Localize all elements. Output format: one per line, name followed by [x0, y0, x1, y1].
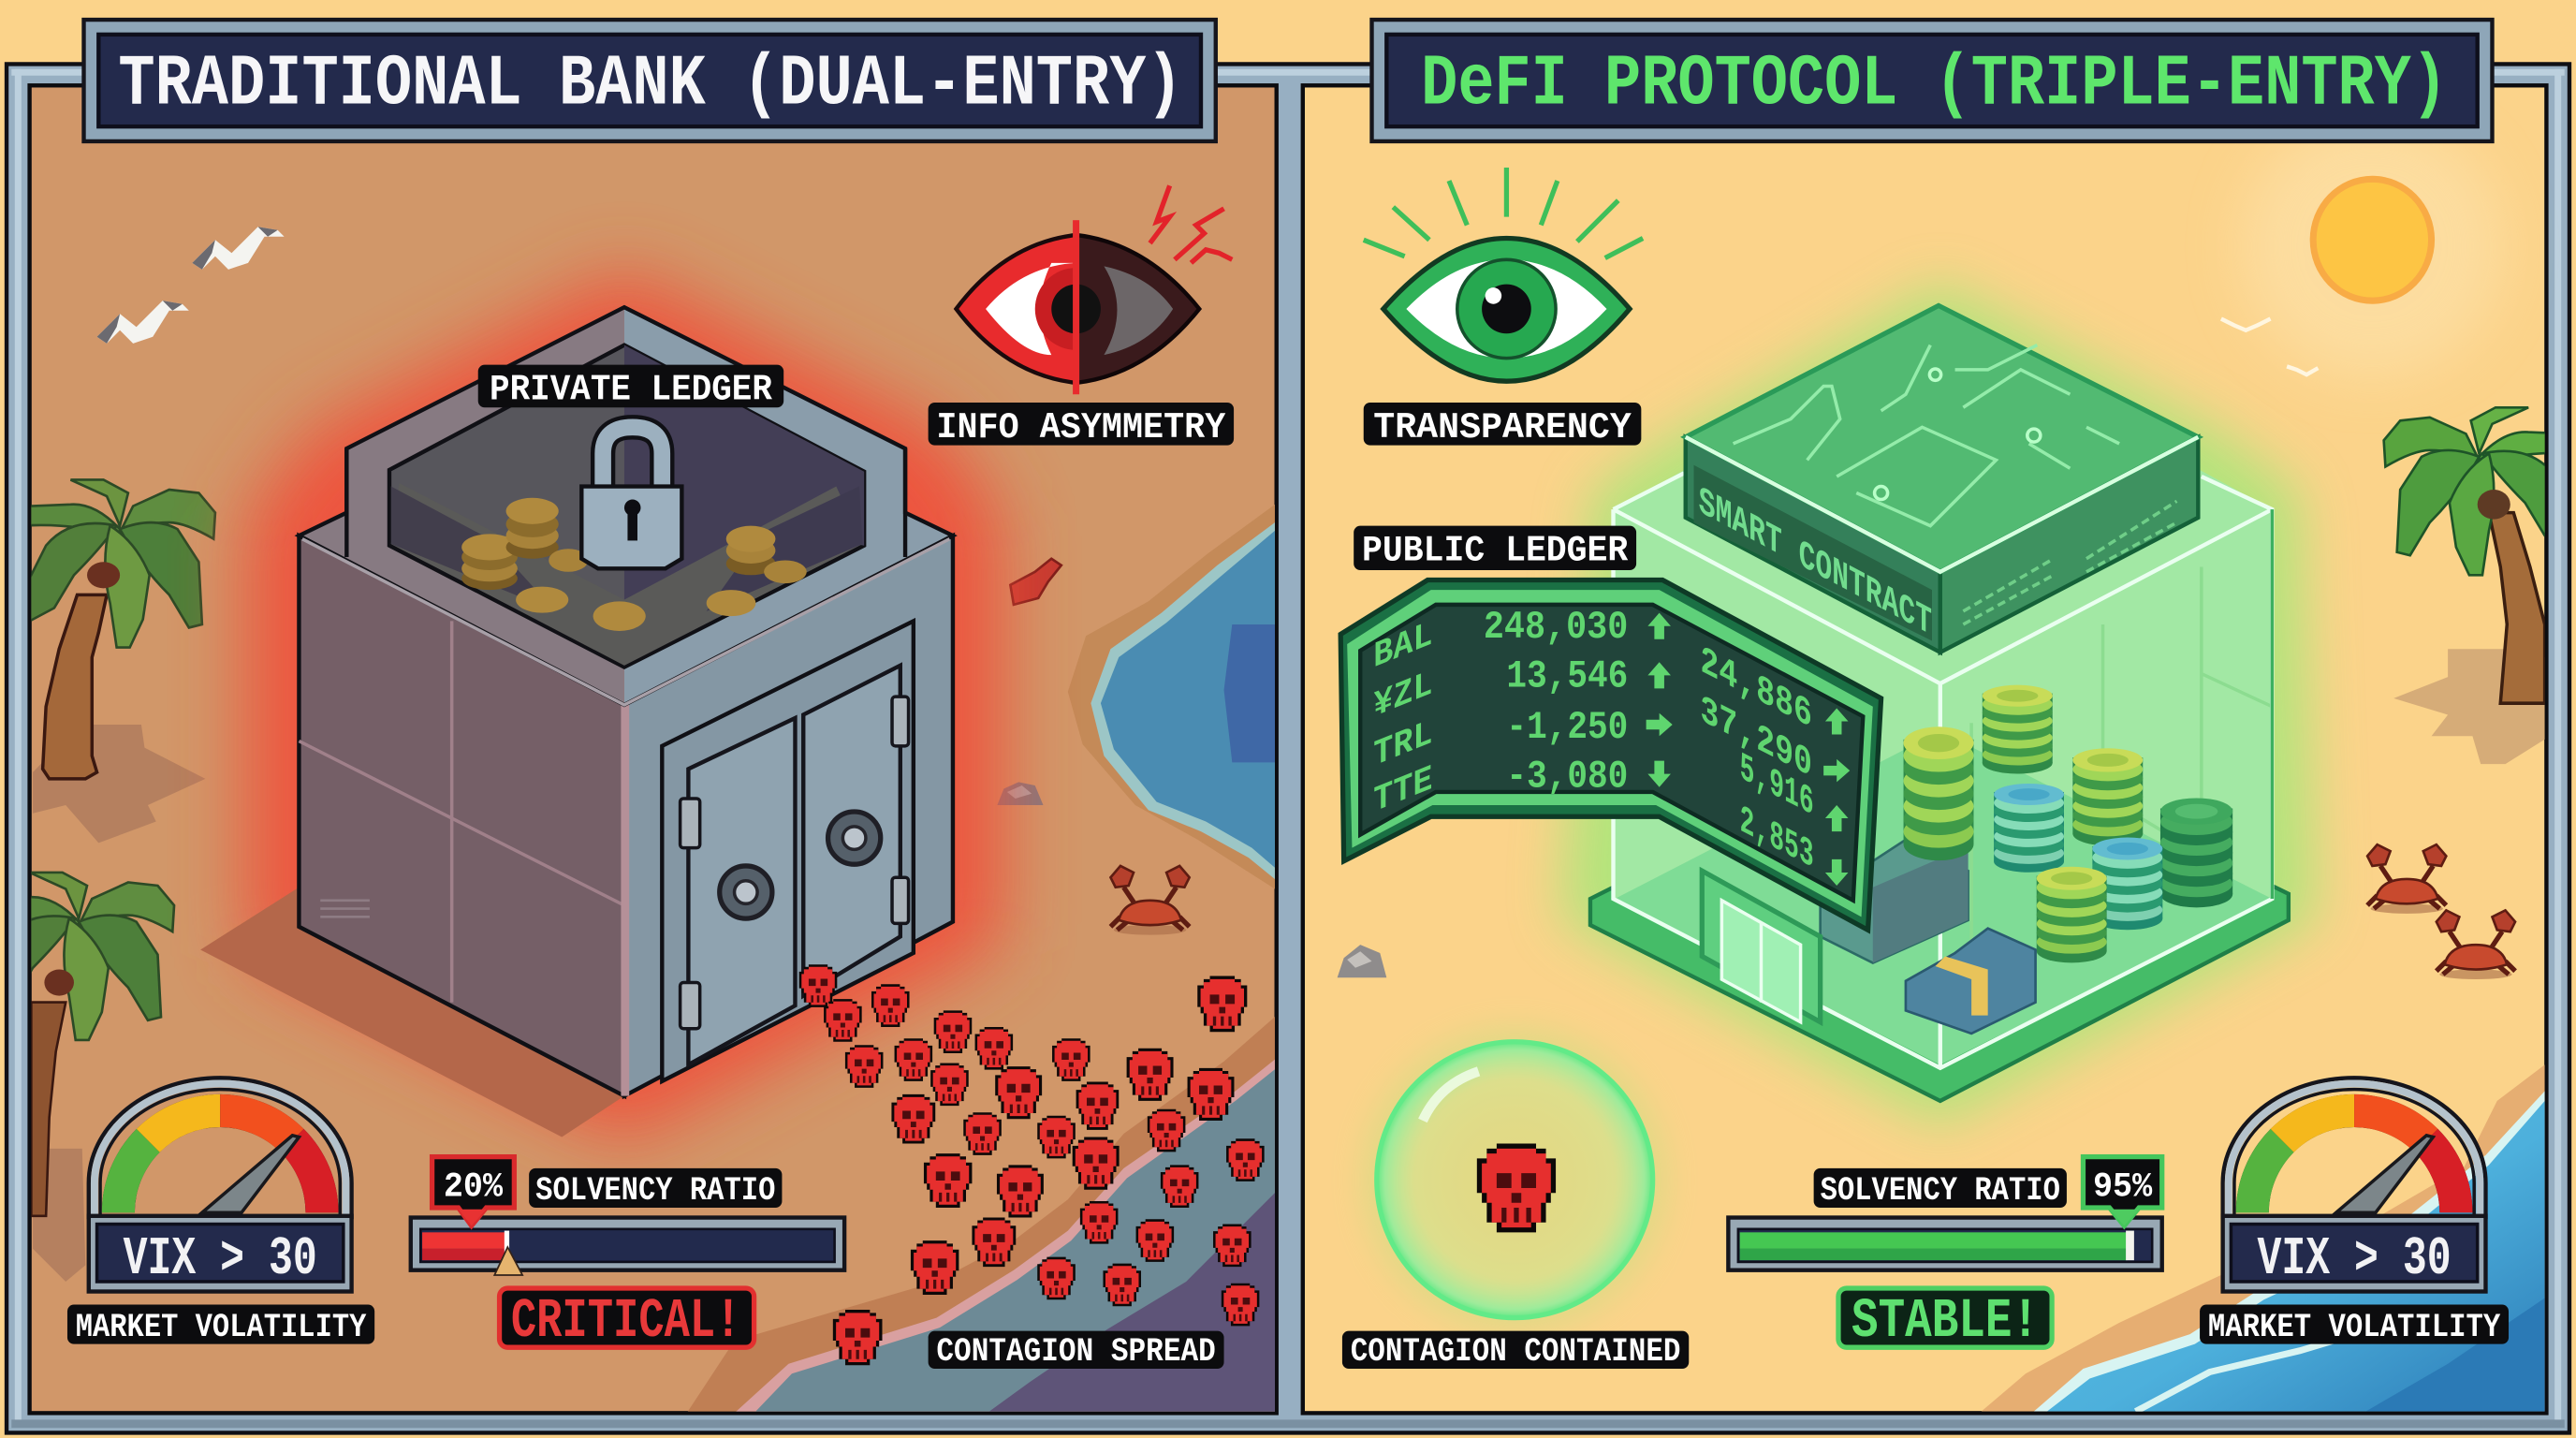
vault shadow	[200, 888, 624, 1137]
seagulls	[97, 227, 285, 344]
solvency pointer 20%	[432, 1157, 514, 1225]
icon: green eye	[1364, 168, 1643, 381]
transparency label: TRANSPARENCY	[1373, 407, 1632, 448]
volatility gauge right	[2223, 1078, 2485, 1292]
fill	[1740, 1232, 2128, 1249]
green building glow	[1560, 283, 2317, 1125]
palm shadow	[2393, 649, 2545, 764]
solvency ratio label right: SOLVENCY RATIO	[1821, 1172, 2060, 1210]
ledger values angled: 24,886	[1701, 638, 1812, 740]
sun	[2241, 115, 2504, 378]
contagion spread label: CONTAGION SPREAD	[936, 1333, 1216, 1371]
coin stacks	[1904, 685, 2232, 962]
distant birds	[2221, 318, 2318, 374]
cash boxes blue	[1906, 929, 2036, 1034]
crabs	[2367, 844, 2515, 979]
vix value: VIX > 30	[2258, 1229, 2452, 1290]
vault door	[662, 621, 914, 1081]
ledger left labels: ¥ZL	[1373, 664, 1432, 728]
info asymmetry label: INFO ASYMMETRY	[936, 407, 1226, 448]
rock	[997, 782, 1043, 805]
palm shadow	[33, 725, 205, 843]
market volatility label: MARKET VOLATILITY	[2208, 1309, 2500, 1346]
icon: split red eye	[956, 185, 1232, 394]
ledger values: -3,080	[1506, 755, 1628, 800]
vault glass interior	[389, 345, 864, 668]
crab	[1110, 866, 1190, 935]
palm tree lower	[31, 871, 176, 1282]
panel background	[1303, 85, 2546, 1413]
small crab	[1010, 559, 1061, 605]
ledger values angled: 37,290	[1701, 688, 1812, 789]
coastline: grey sea	[687, 1016, 1277, 1416]
building glass	[1614, 329, 2272, 1064]
ledger values: 248,030	[1484, 605, 1628, 650]
vault dial	[720, 866, 772, 918]
building edges	[1614, 473, 2272, 1068]
ledger left labels	[1373, 614, 1432, 824]
palm tree right	[2382, 406, 2545, 764]
building floor	[1615, 731, 2272, 1064]
vix value: VIX > 30	[124, 1229, 317, 1290]
ledger values angled: 5,916	[1740, 745, 1814, 828]
eye rays	[1364, 168, 1643, 258]
solvency pointer 95%: 95%	[2093, 1168, 2153, 1208]
ledger values	[1484, 605, 1673, 800]
building base	[1590, 723, 2289, 1101]
vault	[299, 307, 953, 1096]
palm tree upper	[22, 479, 215, 843]
coastline: blue sea	[1982, 1064, 2545, 1412]
heading: traditional bank	[84, 20, 1216, 141]
padlock	[581, 427, 681, 568]
gold coins	[461, 498, 807, 631]
ledger values angled: 2,853	[1740, 798, 1814, 880]
vault red glow	[246, 271, 1003, 1142]
solvency ratio label left: SOLVENCY RATIO	[535, 1172, 775, 1210]
panel: traditional bank	[0, 85, 1277, 1416]
contained skull	[1477, 1144, 1556, 1232]
critical badge: CRITICAL!	[511, 1289, 741, 1353]
panel background	[30, 85, 1277, 1413]
solvency bar right	[1728, 1218, 2162, 1270]
heading: traditional bank: TRADITIONAL BANK (DUAL-ENTRY)	[118, 45, 1183, 126]
ledger left labels: TRL	[1373, 713, 1432, 777]
smart contract text: SMART CONTRACT	[1699, 478, 1932, 647]
market volatility label: MARKET VOLATILITY	[76, 1309, 366, 1346]
ledger left labels: BAL	[1373, 614, 1432, 679]
public ledger label: PUBLIC LEDGER	[1362, 530, 1629, 571]
solvency pointer 95%	[2083, 1157, 2162, 1225]
private ledger label: PRIVATE LEDGER	[490, 369, 773, 410]
building door	[1702, 871, 1821, 1022]
panel: defi protocol	[1303, 85, 2576, 1413]
stable badge: STABLE!	[1852, 1289, 2039, 1353]
vault top rim	[299, 307, 624, 705]
solvency bar left	[411, 1218, 844, 1275]
smart contract roof	[1686, 305, 2198, 653]
lightning marks	[1150, 185, 1232, 263]
red skulls: contagion spread	[799, 964, 1265, 1365]
coastline: water	[1068, 505, 1275, 889]
solvency pointer 20%: 20%	[444, 1168, 504, 1208]
public ledger screen	[1340, 580, 1881, 930]
circuit traces	[1734, 345, 2119, 526]
ledger left labels: TTE	[1373, 759, 1432, 824]
vault left face	[299, 536, 624, 1096]
glass bank building	[1590, 305, 2289, 1101]
ledger values: 13,546	[1506, 654, 1628, 699]
contagion bubble	[1364, 1029, 1666, 1331]
heading: defi protocol	[1372, 20, 2492, 141]
fill	[422, 1232, 506, 1249]
rock	[1338, 945, 1386, 977]
ledger values angled	[1701, 638, 1850, 886]
volatility gauge left	[89, 1078, 352, 1292]
palm shadow	[33, 1149, 85, 1282]
vault right face	[624, 536, 953, 1096]
contagion contained label: CONTAGION CONTAINED	[1351, 1333, 1680, 1371]
cash boxes grey	[1821, 840, 1969, 962]
vault dial	[828, 812, 881, 864]
ledger values: -1,250	[1506, 705, 1628, 750]
